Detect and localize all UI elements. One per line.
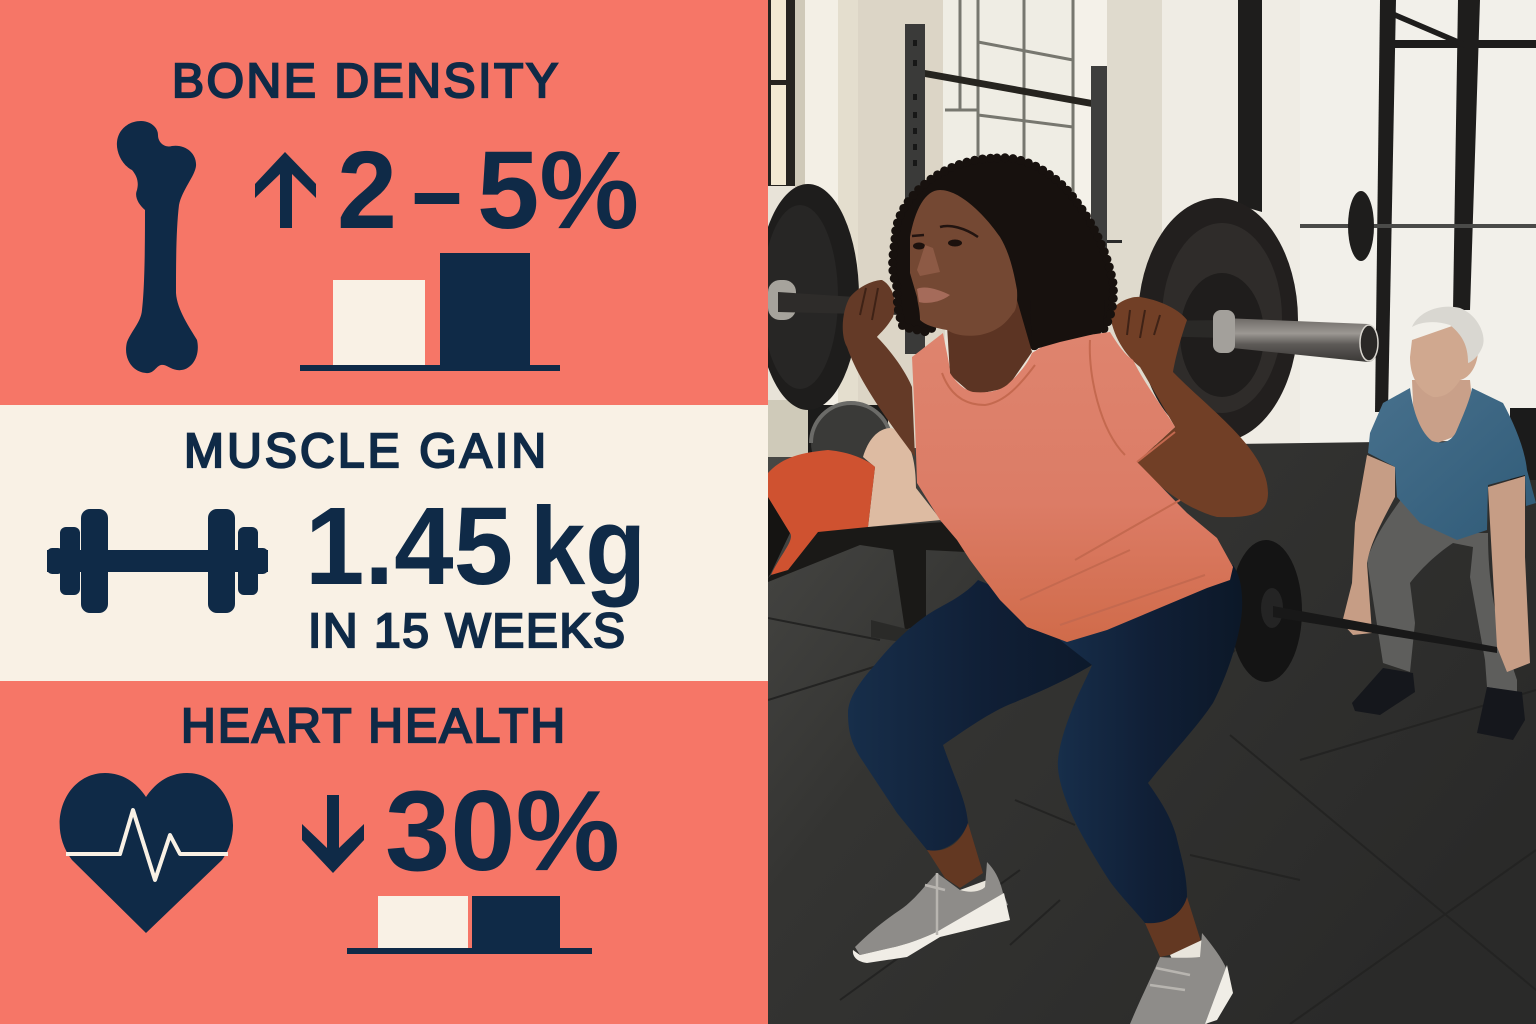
stat: 2-5 percent: 5% [477,129,639,252]
neck [947,300,1032,395]
stat: 1.45 kg [305,485,646,608]
arm: left [843,280,915,457]
hair [893,158,1113,347]
icon: dumbbell [47,509,268,613]
panel: muscle gain [0,405,768,681]
stat: 2-5 percent: – [412,129,462,252]
rack uprights [905,0,1536,412]
rack right [1238,0,1536,412]
bar [1273,606,1497,653]
leggings [1367,498,1517,692]
floor [768,440,1536,1024]
icon: bone [117,121,198,373]
text: in 15 weeks: IN 15 WEEKS [308,605,625,658]
panel: heart health [0,681,768,1024]
face [910,190,1017,336]
stat: 1.45 kg: 1.45 [305,485,513,608]
older woman deadlifting [1230,307,1536,740]
plate and bar [1230,540,1302,682]
box at right wall [1510,408,1536,480]
icon: up arrow [255,152,316,228]
ankles [927,823,1203,957]
icon: heart with pulse [60,773,233,933]
heading: heart health: HEART HEALTH [181,700,565,753]
stat: 30 percent: 30% [385,768,620,895]
leggings [848,565,1242,923]
person on bench [768,400,966,642]
barbell on woman's shoulders [757,184,1378,442]
stat: 1.45 kg: kg [530,485,646,608]
photo: gym squat scene [757,0,1536,1024]
shoes [853,862,1233,1024]
t-shirt [1368,388,1536,540]
panel: bone density [0,0,768,405]
shirt seams [942,340,1205,625]
icon: down arrow [302,795,364,873]
woman squatting [843,158,1268,1024]
arm: right [1110,297,1268,517]
fingers [860,288,1160,338]
head [1410,326,1478,380]
stat: 2-5 percent [337,129,639,252]
heading: bone density: BONE DENSITY [172,55,558,108]
rack left with holes [905,24,1122,354]
arms [1342,455,1530,672]
chart: heart health bars [347,896,592,954]
stat: 2-5 percent: 2 [337,129,397,252]
hair strands over shoulder [1032,332,1102,350]
chart: bone density bars [300,253,560,371]
chest and neck [1412,380,1472,445]
facial features [912,226,978,303]
gym windows and wall [768,0,1536,460]
shirt [912,332,1233,642]
shoes [1352,668,1525,740]
heading: muscle gain: MUSCLE GAIN [184,425,546,478]
